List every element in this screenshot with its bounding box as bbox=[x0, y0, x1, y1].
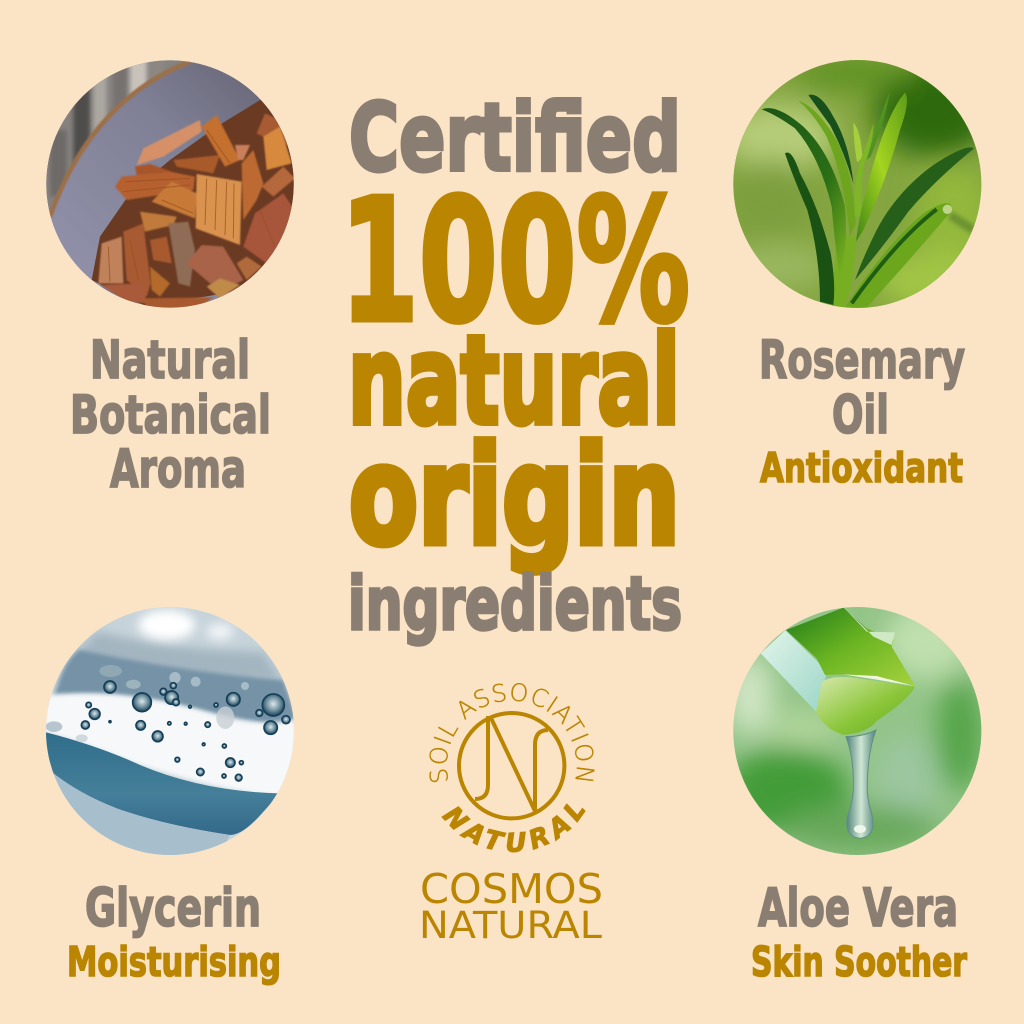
logo: Soil Association Natural seal bbox=[429, 683, 595, 852]
photo: sandalwood chips bbox=[46, 60, 294, 308]
label: Glycerin Moisturising bbox=[67, 878, 281, 986]
headline: 100%: 100% bbox=[340, 163, 690, 361]
logo: Soil Association Natural seal: SOIL ASSOCIATION bbox=[429, 683, 595, 782]
photo: rosemary bbox=[733, 60, 982, 308]
logo: Soil Association Natural seal: NATURAL bbox=[441, 803, 586, 852]
photo: glycerin gel bbox=[46, 607, 294, 855]
logo text: COSMOS NATURAL bbox=[419, 865, 603, 947]
headline: natural: natural bbox=[348, 310, 680, 452]
label: Natural Botanical Aroma: Natural bbox=[90, 330, 250, 391]
label: Natural Botanical Aroma: Aroma bbox=[110, 439, 246, 500]
logo text: COSMOS NATURAL: NATURAL bbox=[419, 904, 602, 947]
headline: Certified: Certified bbox=[349, 84, 681, 193]
label: Rosemary Oil Antioxidant bbox=[759, 330, 965, 492]
label: Rosemary Oil Antioxidant: Antioxidant bbox=[760, 444, 963, 492]
headline: origin: origin bbox=[349, 418, 680, 576]
label: Glycerin Moisturising: Glycerin bbox=[85, 878, 261, 939]
label: Natural Botanical Aroma bbox=[70, 330, 271, 500]
logo text: COSMOS NATURAL: COSMOS bbox=[420, 865, 603, 913]
photo: aloe vera bbox=[733, 607, 982, 855]
label: Natural Botanical Aroma: Botanical bbox=[70, 385, 271, 446]
label: Aloe Vera Skin Soother bbox=[751, 878, 968, 986]
label: Glycerin Moisturising: Moisturising bbox=[67, 938, 281, 986]
headline: ingredients: ingredients bbox=[348, 562, 682, 647]
label: Rosemary Oil Antioxidant: Oil bbox=[832, 385, 889, 446]
